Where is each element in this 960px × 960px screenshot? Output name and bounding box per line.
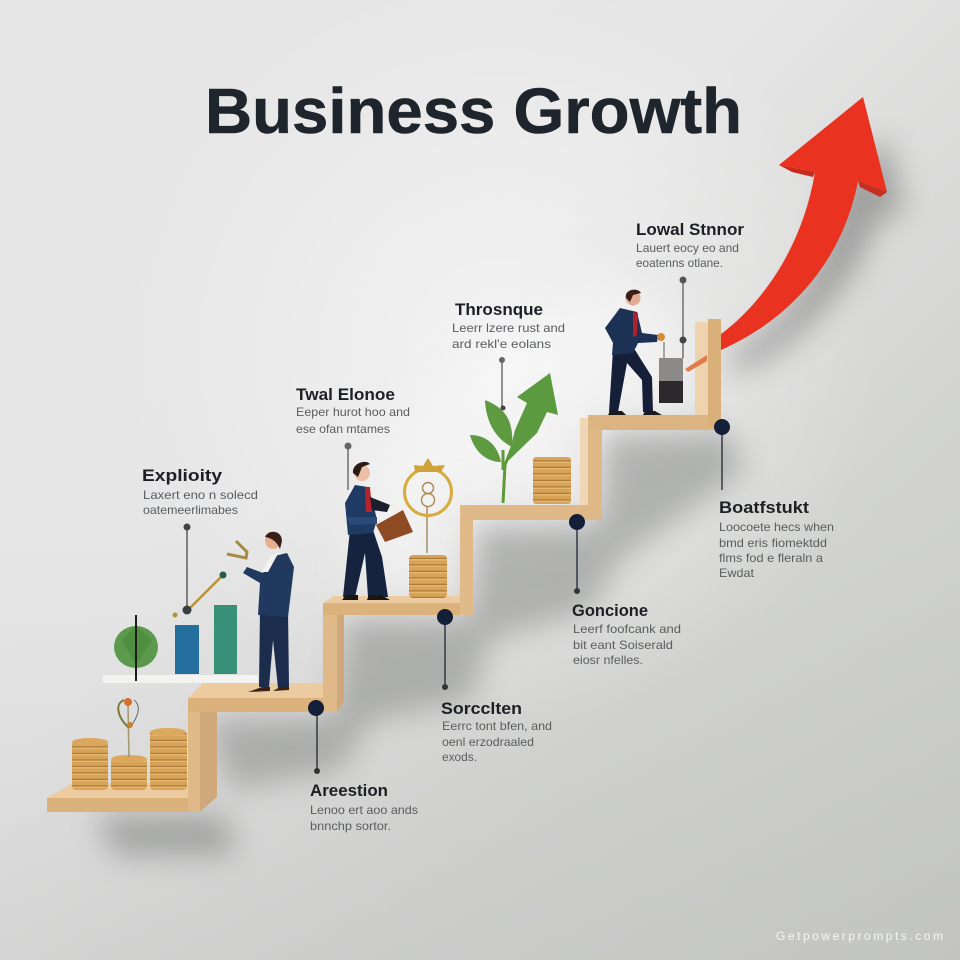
hand object — [657, 333, 665, 341]
label: Goncione — [572, 602, 681, 667]
label: Explioity: oatemeerlimabes — [143, 503, 238, 517]
label: Lowal Stnnor: Lowal Stnnor — [636, 221, 745, 239]
step 1 coins and sprout — [72, 698, 187, 790]
head — [354, 465, 370, 481]
legs — [609, 350, 653, 412]
pin: Explioity — [182, 524, 192, 614]
label: Twal Elonoe: Twal Elonoe — [296, 386, 395, 404]
watermark: Getpowerprompts.com — [776, 929, 943, 943]
red wedge — [685, 355, 707, 372]
briefcase — [376, 510, 413, 542]
step 2 — [188, 603, 344, 712]
label: Boatfstukt: flms fod e fleraln a — [719, 551, 823, 565]
step 5 — [589, 319, 721, 430]
label: Explioity — [142, 467, 258, 517]
step 4 — [462, 415, 602, 520]
arrow leaf — [507, 373, 558, 462]
pin: Lowal Stnnor — [680, 276, 686, 358]
hair — [353, 462, 370, 477]
sprout — [118, 698, 138, 757]
coin stack middle — [111, 755, 147, 790]
pin: Boatfstukt — [714, 419, 730, 490]
bag handle — [663, 342, 665, 358]
jacket — [243, 553, 294, 617]
label: Goncione: bit eant Soiserald — [573, 638, 673, 652]
coin stack right — [150, 728, 187, 790]
label: Areestion: bnnchp sortor. — [310, 819, 391, 833]
tree icon — [114, 615, 158, 681]
wooden staircase — [47, 319, 721, 812]
label: Sorcclten: oenl erzodraaled — [442, 735, 534, 749]
label: Areestion: Areestion — [310, 782, 388, 800]
coin stack step 4 — [533, 457, 571, 504]
trend line — [172, 572, 226, 618]
label: Boatfstukt — [719, 499, 834, 580]
blue bar — [175, 625, 199, 674]
pin: Goncione — [569, 514, 585, 594]
hair — [626, 290, 641, 302]
legs — [259, 610, 289, 688]
label: Sorcclten — [441, 700, 552, 764]
businessman 2 with briefcase — [342, 462, 413, 600]
label: Lowal Stnnor: eoatenns otlane. — [636, 256, 723, 270]
jacket — [605, 308, 658, 355]
head — [626, 290, 640, 306]
businessman 3 with bag — [605, 290, 707, 415]
tool — [227, 541, 247, 558]
small white shelf with chart — [103, 572, 258, 683]
green bar — [214, 605, 237, 674]
stem — [426, 507, 428, 553]
bow — [414, 458, 445, 472]
stair shadows — [95, 432, 745, 855]
label: Throsnque: Throsnque — [455, 301, 543, 319]
arm — [370, 497, 390, 512]
bag — [659, 358, 683, 403]
ring — [404, 468, 452, 516]
coin stack left — [72, 738, 108, 790]
label: Twal Elonoe: ese ofan mtames — [296, 422, 390, 436]
label: Boatfstukt: Boatfstukt — [719, 499, 810, 517]
label: Twal Elonoe: Eeper hurot hoo and — [296, 405, 410, 419]
gold ring on coin stack — [404, 458, 452, 598]
coin stack — [409, 555, 447, 598]
label: Explioity: Laxert eno n solecd — [143, 488, 258, 502]
arrow shadow — [730, 135, 905, 375]
label: Sorcclten: Sorcclten — [441, 700, 522, 718]
tie — [365, 487, 372, 512]
head — [265, 533, 281, 549]
arrow: red growth arrow — [721, 97, 905, 375]
label: Sorcclten: Eerrc tont bfen, and — [442, 719, 552, 733]
label: Twal Elonoe — [296, 386, 410, 436]
label: Throsnque: ard rekl'e eolans — [452, 337, 551, 351]
green plant with arrow — [470, 373, 558, 503]
shoes — [342, 595, 390, 600]
label: Goncione: Goncione — [572, 602, 648, 620]
tie — [633, 312, 638, 337]
label: Lowal Stnnor: Lauert eocy eo and — [636, 241, 739, 255]
shoes — [248, 687, 289, 692]
pin: Throsnque — [499, 357, 506, 410]
left leaf lower — [470, 435, 501, 462]
label: Throsnque: Leerr lzere rust and — [452, 321, 565, 335]
stem — [503, 440, 515, 503]
businessman 1 — [227, 532, 294, 692]
label: Areestion — [310, 782, 418, 833]
pin: Sorcclten — [437, 609, 453, 690]
shirt — [262, 552, 279, 572]
shelf — [103, 675, 258, 683]
left leaf upper — [485, 400, 512, 447]
title: Business Growth — [205, 75, 742, 147]
label: Lowal Stnnor — [636, 221, 745, 270]
label: Boatfstukt: Ewdat — [719, 566, 755, 580]
label: Boatfstukt: bmd eris fiomektdd — [719, 536, 827, 550]
label: Throsnque — [452, 301, 565, 351]
hair — [265, 532, 282, 549]
pin: Areestion — [308, 700, 324, 774]
label: Areestion: Lenoo ert aoo ands — [310, 803, 418, 817]
label: Goncione: Leerf foofcank and — [573, 622, 681, 636]
jacket — [345, 485, 377, 535]
step 1 — [47, 712, 217, 812]
shoes — [608, 411, 662, 415]
pin: Twal Elonoe — [344, 442, 352, 490]
label: Explioity: Explioity — [142, 467, 223, 485]
white glow above stairs — [350, 280, 690, 590]
legs — [343, 530, 388, 597]
label: Sorcclten: exods. — [442, 750, 477, 764]
label: Goncione: eiosr nfelles. — [573, 653, 643, 667]
step 3 — [323, 505, 473, 615]
label: Boatfstukt: Loocoete hecs when — [719, 520, 834, 534]
